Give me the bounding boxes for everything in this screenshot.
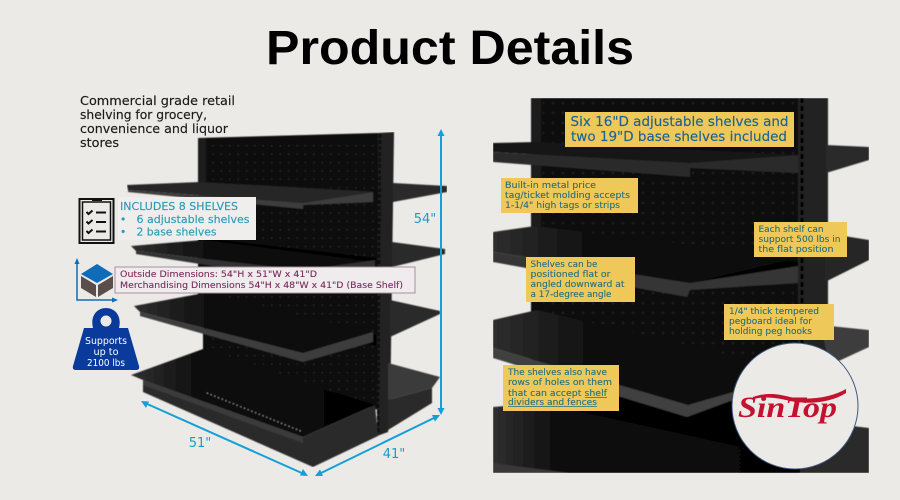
callout: angled shelves: angled downward at bbox=[530, 280, 625, 290]
callout: shelf holes: dividers and fences bbox=[508, 398, 597, 408]
callout: tempered pegboard bbox=[724, 304, 834, 340]
right shelf wings bbox=[393, 183, 447, 202]
second shelf bbox=[131, 240, 376, 270]
top shelf bbox=[127, 182, 378, 203]
callout: shelf capacity: the flat position bbox=[758, 245, 834, 255]
callout: shelf capacity bbox=[754, 222, 847, 257]
callout: includes 8 shelves: • bbox=[120, 214, 126, 226]
intro text block: convenience and liquor bbox=[80, 122, 228, 136]
callout: dimensions bbox=[115, 267, 415, 293]
dimension arrow: width 51 inches bbox=[141, 401, 308, 476]
icon: weight supports up to 2100 lbs: Supports bbox=[85, 336, 127, 347]
callout: shelf holes bbox=[503, 365, 619, 411]
callout: dimensions: Merchandising Dimensions 54"H x 48"W x 41"D (Base Shelf) bbox=[120, 281, 403, 291]
callout: price tag molding bbox=[501, 178, 638, 213]
close-up shelf 3 bbox=[493, 310, 750, 404]
callout: shelf capacity: support 500 lbs in bbox=[758, 235, 840, 245]
icon: clipboard checklist bbox=[80, 198, 114, 243]
callout: shelf holes: rows of holes on them bbox=[508, 378, 612, 388]
title: Product Details bbox=[266, 22, 634, 75]
icon: weight supports up to 2100 lbs: up to bbox=[94, 347, 119, 358]
callout: includes 8 shelves: 2 base shelves bbox=[136, 226, 216, 238]
close-up photo of shelving bbox=[493, 98, 869, 473]
intro text block: Commercial grade retail bbox=[80, 94, 235, 108]
upright post bbox=[377, 132, 394, 436]
icon: weight supports up to 2100 lbs bbox=[73, 308, 139, 370]
callout: price tag molding: Built-in metal price bbox=[505, 181, 596, 191]
callout: tempered pegboard: holding peg hooks bbox=[729, 327, 812, 337]
close-up shelf 1 bbox=[493, 142, 798, 163]
callout: price tag molding: tag/ticket molding accepts bbox=[505, 191, 630, 201]
base shelf bbox=[131, 349, 375, 437]
icon: cube with axes bbox=[74, 258, 118, 302]
callout: tempered pegboard: pegboard ideal for bbox=[729, 317, 812, 327]
logo: SinTop: SinTop bbox=[738, 391, 837, 424]
callout: includes 8 shelves: • bbox=[120, 226, 126, 238]
dimension arrow: height 54 inches bbox=[438, 129, 444, 415]
callout: includes 8 shelves: INCLUDES 8 SHELVES bbox=[120, 201, 238, 213]
callout: dimensions: Outside Dimensions: 54"H x 51"W x 41"D bbox=[120, 270, 317, 280]
callout: shelf holes: The shelves also have bbox=[507, 368, 607, 378]
callout: tempered pegboard: 1/4" thick tempered bbox=[729, 307, 819, 317]
callout: six adjustable shelves: Six 16"D adjustable shelves and bbox=[570, 115, 788, 130]
dimension label: 54 inches: 54" bbox=[414, 212, 436, 227]
callout: price tag molding: 1-1/4" high tags or strips bbox=[505, 201, 620, 211]
callout: angled shelves: positioned flat or bbox=[530, 270, 611, 280]
close-up base shelf bbox=[493, 403, 800, 473]
close-up right wings bbox=[826, 145, 869, 173]
intro text block: stores bbox=[80, 136, 119, 150]
callout: angled shelves: a 17-degree angle bbox=[530, 290, 612, 300]
icon: weight supports up to 2100 lbs: 2100 lbs bbox=[87, 358, 125, 369]
callout: angled shelves bbox=[526, 257, 635, 302]
dimension label: 41 inches: 41" bbox=[383, 447, 405, 462]
intro text block: shelving for grocery, bbox=[80, 108, 207, 122]
logo: SinTop bbox=[732, 343, 858, 469]
dimension arrow: depth 41 inches bbox=[315, 415, 440, 476]
callout: shelf holes: that can accept shelf bbox=[508, 389, 608, 399]
intro text block bbox=[80, 94, 235, 150]
callout: shelf capacity: Each shelf can bbox=[758, 225, 824, 235]
close-up shelf 2 bbox=[493, 226, 798, 283]
close-up pegboard bbox=[530, 98, 799, 450]
callout: includes 8 shelves bbox=[118, 197, 256, 240]
callout: includes 8 shelves: 6 adjustable shelves bbox=[136, 214, 250, 226]
callout: angled shelves: Shelves can be bbox=[530, 260, 598, 270]
callout: six adjustable shelves bbox=[565, 112, 794, 147]
third shelf bbox=[134, 293, 373, 353]
dimension label: 51 inches: 51" bbox=[189, 436, 211, 451]
callout: six adjustable shelves: two 19"D base shelves included bbox=[571, 130, 787, 145]
gondola shelving unit illustration bbox=[127, 132, 447, 467]
pegboard back bbox=[198, 133, 378, 410]
